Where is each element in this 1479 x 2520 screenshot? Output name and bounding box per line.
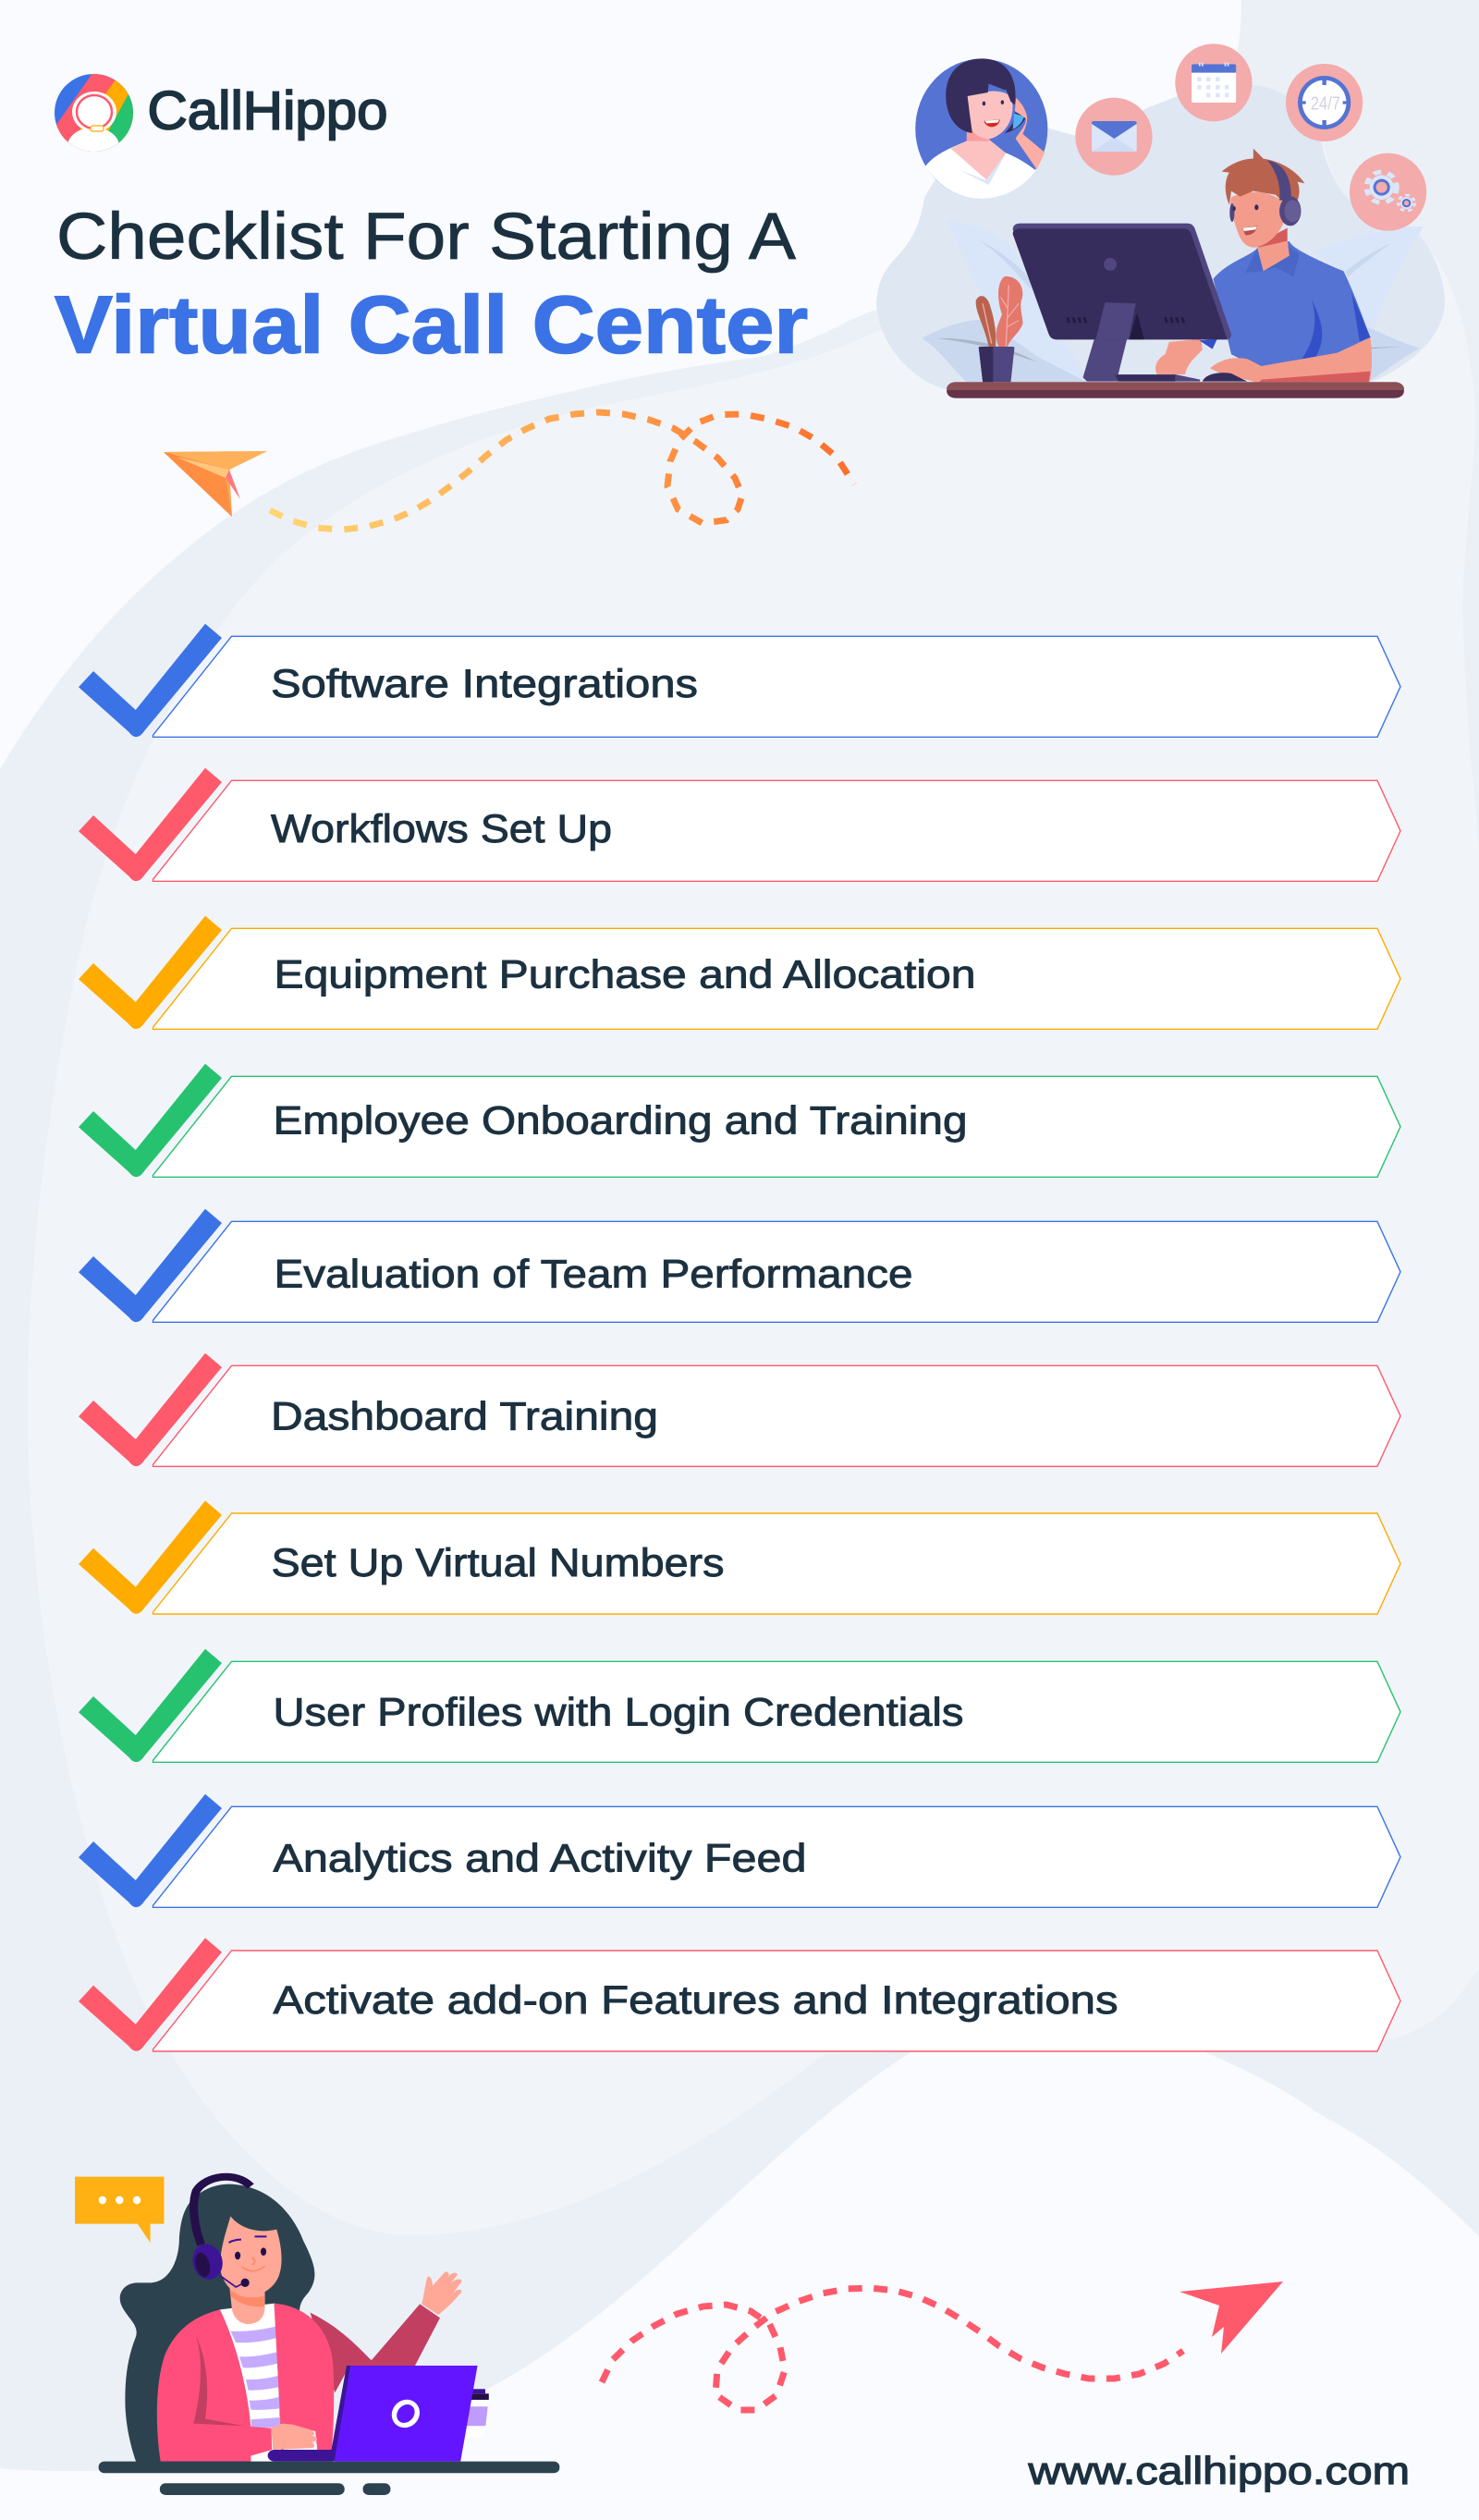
icon: envelope <box>1075 98 1153 176</box>
potted plant <box>976 276 1022 382</box>
dashed flight path: red <box>602 2288 1183 2410</box>
checklist row 8 <box>79 1649 1400 1762</box>
icon: 24/7 clock: 24/7 <box>1311 92 1340 114</box>
checklist row 3: Equipment Purchase and Allocation <box>274 952 976 997</box>
desk <box>947 382 1404 398</box>
icon: calendar <box>1175 43 1253 121</box>
checklist row 1 <box>79 624 1400 737</box>
checklist row 5: Evaluation of Team Performance <box>274 1252 913 1296</box>
checklist row 4 <box>79 1064 1400 1177</box>
checklist row 6 <box>79 1353 1400 1466</box>
man with headset <box>1155 149 1372 382</box>
icon: gears <box>1350 153 1426 231</box>
checklist row 9: Analytics and Activity Feed <box>274 1836 806 1880</box>
checklist row 4: Employee Onboarding and Training <box>274 1098 967 1143</box>
checklist row 9 <box>79 1794 1400 1907</box>
desk and base bars <box>99 2462 559 2495</box>
checklist row 3 <box>79 916 1400 1029</box>
paper plane: red <box>1180 2281 1283 2354</box>
laptop <box>268 2366 478 2462</box>
computer monitor <box>1013 224 1231 382</box>
checklist row 8: User Profiles with Login Credentials <box>274 1690 963 1734</box>
checklist row 7 <box>79 1500 1400 1614</box>
checklist row 1: Software Integrations <box>271 662 698 706</box>
logo wordmark: CallHippo <box>148 81 388 141</box>
blob background <box>876 84 1445 390</box>
speech bubble <box>75 2177 164 2243</box>
website url: www.callhippo.com <box>1027 2449 1410 2492</box>
coffee cup <box>460 2389 489 2438</box>
hair and body <box>120 2184 461 2462</box>
checklist row 10: Activate add-on Features and Integrations <box>274 1978 1118 2023</box>
headset <box>190 2177 251 2287</box>
background leaves <box>922 220 1424 382</box>
checklist row 6: Dashboard Training <box>271 1394 658 1438</box>
hero illustration: agents and icons <box>876 43 1445 398</box>
checklist row 10 <box>79 1938 1400 2051</box>
title line 1: Checklist For Starting A <box>56 201 797 274</box>
dashed flight path: orange <box>270 412 854 530</box>
checklist row 2: Workflows Set Up <box>271 807 612 851</box>
icon: woman on phone <box>915 58 1047 199</box>
icon: 24/7 clock <box>1286 64 1363 141</box>
checklist row 2 <box>79 768 1400 881</box>
logo icon <box>55 74 133 152</box>
paper plane: orange <box>164 451 267 517</box>
checklist row 5 <box>79 1209 1400 1322</box>
checklist row 7: Set Up Virtual Numbers <box>272 1541 725 1585</box>
title line 2: Virtual Call Center <box>55 279 808 370</box>
woman agent at laptop illustration <box>75 2177 559 2495</box>
